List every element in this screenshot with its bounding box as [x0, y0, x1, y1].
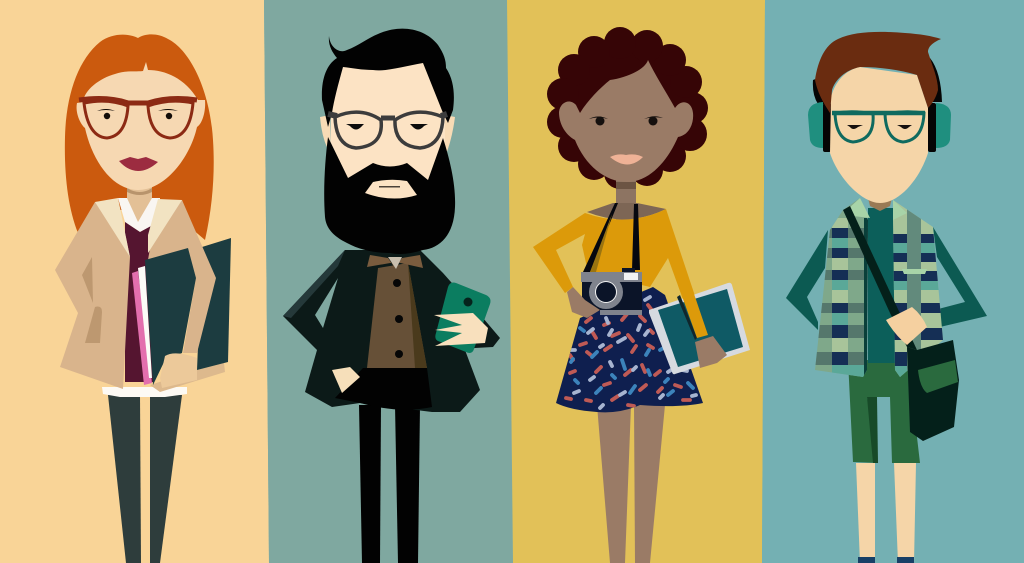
shoulders skin — [587, 203, 666, 219]
white hem — [102, 387, 187, 397]
hand on phone — [434, 313, 488, 346]
panel: mustard background — [507, 0, 765, 563]
face — [559, 60, 693, 182]
bag strap — [843, 206, 917, 350]
eyes — [847, 125, 912, 129]
eyes — [589, 116, 663, 126]
collars — [849, 198, 907, 220]
character: young man with headphones and shoulder bag — [786, 32, 987, 563]
burgundy top — [125, 222, 154, 382]
hand in pocket — [332, 367, 360, 393]
trouser top — [335, 368, 432, 410]
mouth patch — [365, 180, 417, 199]
glasses — [79, 99, 197, 138]
hair — [65, 34, 214, 240]
legs — [597, 405, 665, 563]
glasses — [328, 112, 447, 148]
tablet hand — [695, 336, 727, 368]
waistcoat — [367, 263, 427, 368]
mustard top — [533, 209, 708, 338]
coat arm shadow — [82, 257, 93, 303]
legs — [108, 395, 182, 563]
headphone cups — [808, 102, 951, 152]
shorts — [848, 360, 920, 463]
neck — [616, 180, 636, 220]
pocket flap — [902, 269, 927, 274]
skirt — [556, 287, 703, 412]
forearm over tablet — [677, 285, 708, 340]
eyes — [346, 124, 428, 130]
coat left side — [55, 200, 130, 389]
hair — [547, 27, 708, 189]
hair — [815, 32, 941, 113]
green phone — [435, 282, 490, 353]
shoulder bag — [907, 340, 959, 441]
dark folder — [145, 248, 196, 385]
waistcoat buttons — [393, 279, 403, 358]
panel: sage background — [264, 0, 513, 563]
skirt pattern — [566, 297, 696, 408]
pink book — [132, 271, 152, 385]
coat tail — [150, 363, 225, 392]
character: red-haired woman with folder — [55, 34, 231, 563]
panel: peach background — [0, 0, 269, 563]
tablet — [649, 283, 750, 374]
hand — [160, 353, 197, 388]
white book — [138, 266, 152, 378]
teal arms — [786, 227, 987, 330]
camera hand — [567, 287, 600, 318]
glasses — [832, 112, 925, 142]
panel: teal background — [762, 0, 1024, 563]
face — [77, 62, 205, 190]
neck shadow — [868, 198, 892, 211]
waistcoat shadow — [408, 263, 427, 368]
folder back — [197, 238, 231, 370]
character: woman with camera and tablet — [533, 27, 750, 563]
legs — [856, 463, 916, 563]
gap between arm and body — [315, 278, 338, 328]
collar lining — [95, 198, 182, 257]
character: bearded man with green phone — [283, 29, 500, 563]
shirt — [868, 208, 895, 363]
headphone band — [813, 58, 942, 104]
hair — [322, 29, 454, 127]
camera — [581, 268, 642, 315]
hand — [886, 307, 927, 345]
plaid right panel — [893, 200, 943, 377]
coat pocket — [85, 307, 102, 343]
face — [330, 58, 445, 182]
lips — [610, 154, 643, 164]
trousers — [359, 405, 420, 563]
neck — [127, 185, 152, 225]
beard — [324, 137, 455, 254]
ears — [320, 115, 455, 157]
eyes — [97, 109, 178, 119]
jacket — [283, 250, 500, 412]
plaid left panel — [815, 198, 868, 377]
bow tie — [367, 255, 423, 269]
coat right side — [148, 200, 216, 353]
sleeve highlight — [283, 250, 345, 318]
lips — [119, 157, 158, 171]
mouth — [379, 186, 400, 188]
camera straps — [583, 203, 640, 272]
white shirt collar — [118, 198, 160, 232]
face — [830, 67, 928, 203]
